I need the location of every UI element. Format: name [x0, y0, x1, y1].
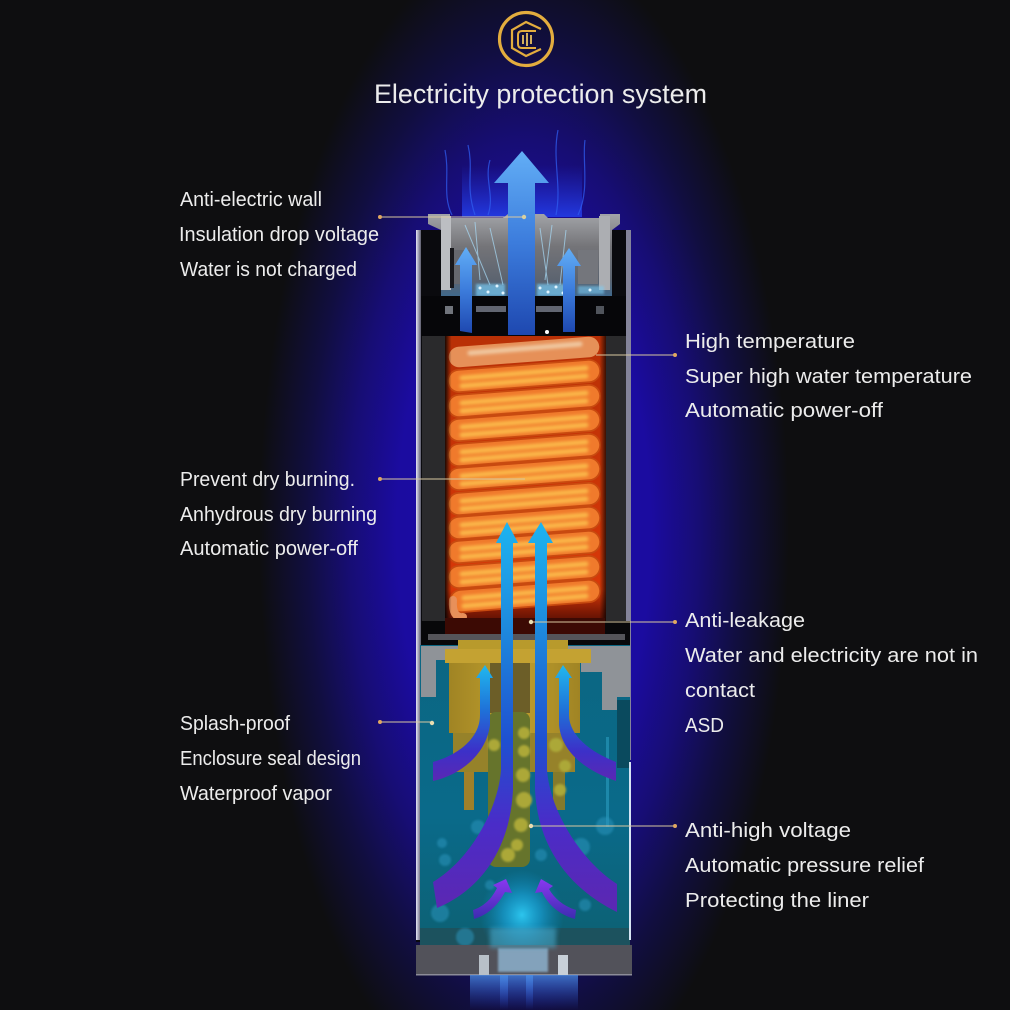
label: prevent dry burning: Automatic power-off [180, 538, 358, 560]
black base [421, 296, 626, 336]
arrow: large central up arrow [494, 151, 549, 335]
label: anti-high voltage: Automatic pressure relief [685, 855, 924, 877]
label: high temperature: Super high water temperature [685, 366, 972, 388]
tube body [416, 230, 631, 942]
label: splash-proof: Splash-proof [180, 713, 290, 735]
label: prevent dry burning: Prevent dry burning. [180, 469, 355, 491]
coil separators [459, 371, 589, 601]
coil highlights [462, 368, 586, 606]
label: splash-proof: Waterproof vapor [180, 783, 332, 805]
outer casing rims [416, 230, 630, 942]
label: anti-electric wall: Anti-electric wall [180, 189, 322, 211]
arrow: short right curved [555, 665, 616, 781]
label: high temperature: High temperature [685, 331, 855, 353]
arrow: tiny left [473, 879, 512, 919]
base cap [416, 928, 632, 976]
light reflection at right wall [606, 737, 609, 827]
label: anti-leakage: contact [685, 680, 755, 702]
label: high temperature: Automatic power-off [685, 400, 883, 422]
label: prevent dry burning [180, 469, 377, 560]
label: anti-high voltage: Protecting the liner [685, 890, 869, 912]
leader lines [378, 215, 677, 828]
sparks in cup [465, 222, 566, 285]
cyan jet glow at the outlet [480, 870, 564, 960]
lower black band and plate [421, 618, 630, 646]
label: anti-leakage: ASD [685, 715, 724, 737]
label: anti-electric wall: Water is not charged [180, 259, 357, 281]
arrow: tiny right [535, 879, 576, 919]
label: high temperature [685, 331, 972, 422]
water chamber [420, 645, 631, 946]
title: Electricity protection system [374, 79, 707, 109]
arrow: long right curved [528, 522, 617, 912]
label: anti-leakage: Anti-leakage [685, 610, 805, 632]
heating coil [445, 336, 606, 634]
label: anti-leakage: Water and electricity are not in [685, 645, 978, 667]
label: anti-electric wall [179, 189, 379, 281]
grey housing cap [421, 646, 630, 710]
label: anti-high voltage: Anti-high voltage [685, 820, 851, 842]
label: anti-high voltage [685, 820, 924, 912]
arrow: long left curved [433, 522, 518, 908]
arrow: short left curved [433, 665, 493, 781]
icon: shield badge [500, 12, 552, 66]
label: anti-leakage [685, 610, 978, 737]
bubbles around spring [431, 712, 614, 946]
blue electric sparks above the tube [445, 130, 585, 217]
label: splash-proof: Enclosure seal design [180, 748, 361, 770]
arrow: small top left [455, 247, 477, 333]
anti-electric wall cup [421, 214, 626, 336]
coil turns [459, 347, 589, 601]
brass fitting [445, 640, 591, 810]
dark inner wall [422, 336, 445, 621]
label: splash-proof [180, 713, 361, 805]
label: prevent dry burning: Anhydrous dry burning [180, 504, 377, 526]
label: anti-electric wall: Insulation drop voltage [179, 224, 379, 246]
blue light rays below base [470, 975, 578, 1010]
arrow: small top right [557, 248, 581, 332]
